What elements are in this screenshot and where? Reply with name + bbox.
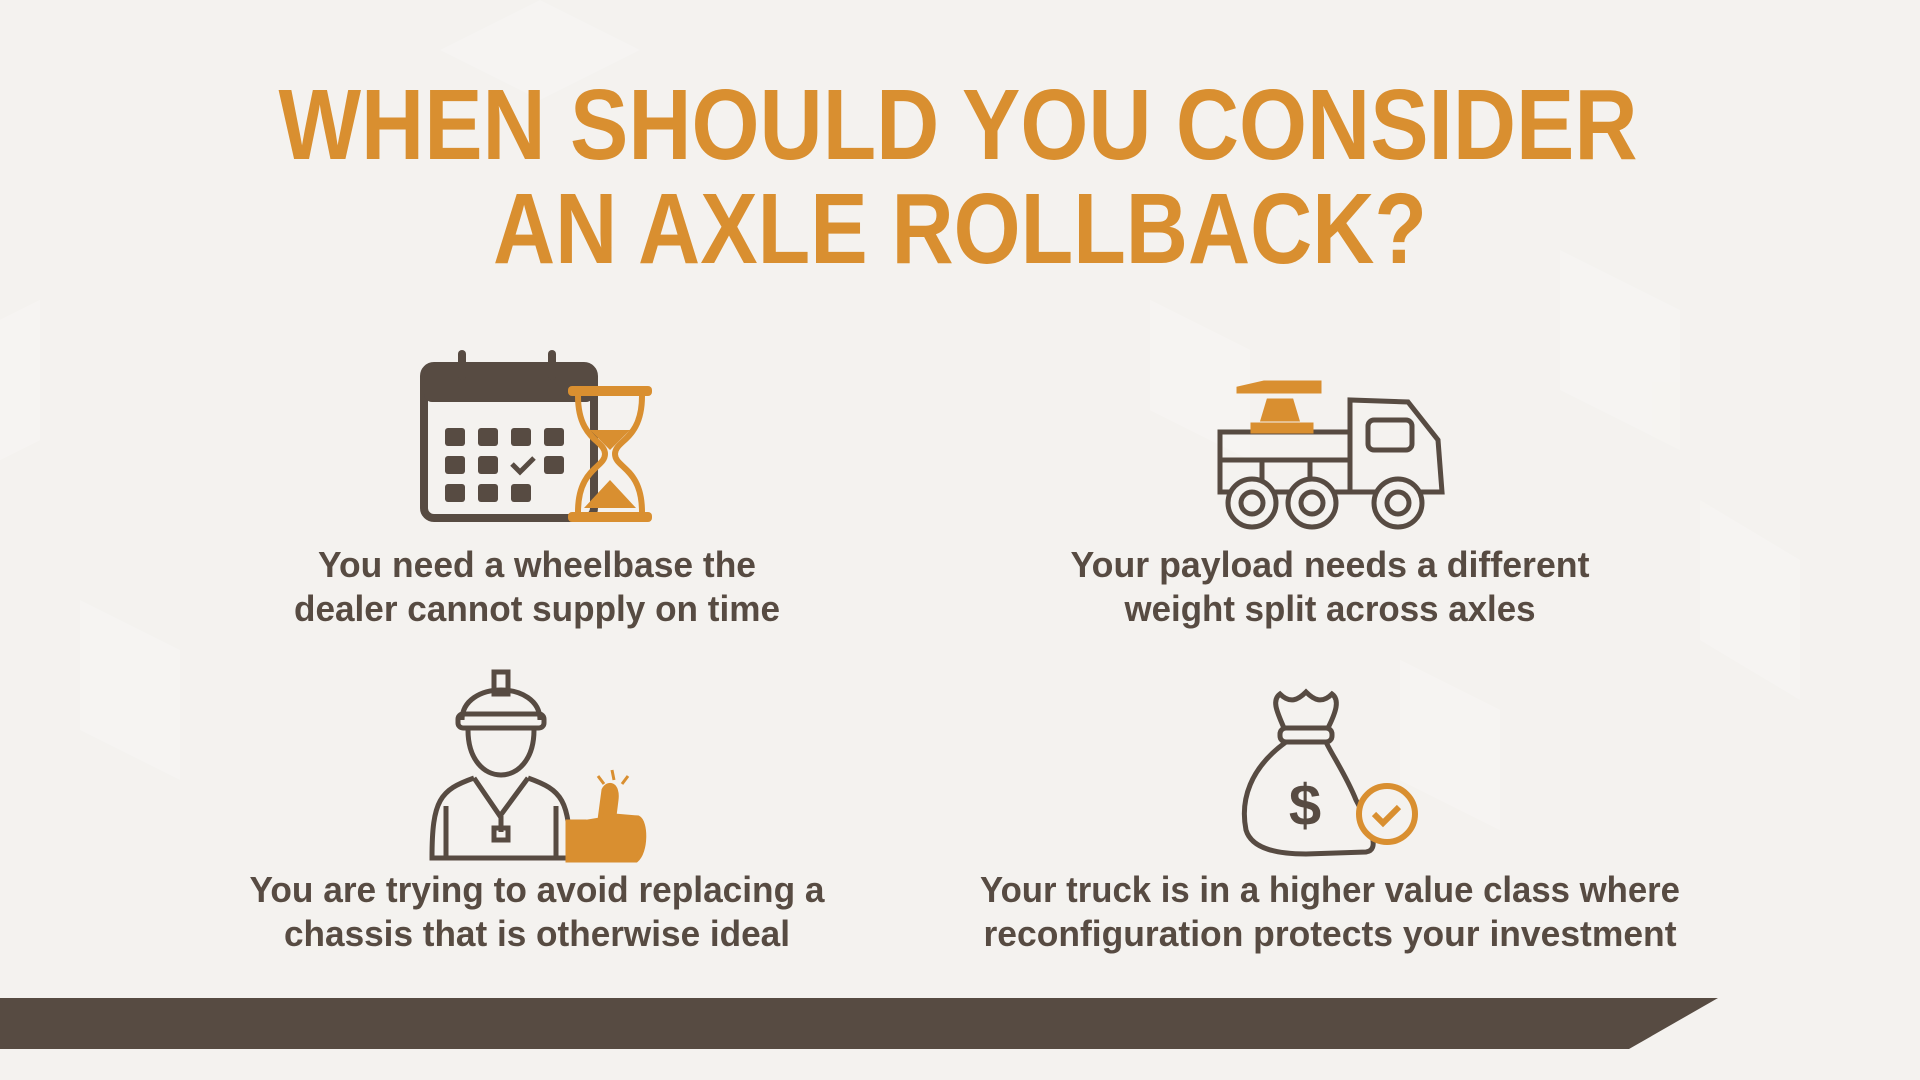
text: chassis: chassis that is otherwise ideal bbox=[284, 913, 790, 954]
text: investment: reconfiguration protects your investment bbox=[984, 913, 1677, 954]
text: payload bbox=[1070, 544, 1590, 629]
icon: worker thumbs up bbox=[432, 672, 644, 860]
text: chassis: You are trying to avoid replacing a bbox=[250, 869, 825, 910]
icon: calendar and hourglass bbox=[424, 350, 652, 522]
text: wheelbase: You need a wheelbase the bbox=[318, 544, 756, 585]
text: investment: Your truck is in a higher value class where bbox=[980, 869, 1680, 910]
bottom bar bbox=[0, 998, 1718, 1049]
icon: truck with anvil bbox=[1220, 382, 1442, 527]
title: AN AXLE ROLLBACK? bbox=[493, 173, 1427, 285]
icon: money bag with check: $ bbox=[1289, 773, 1321, 838]
text: wheelbase bbox=[294, 544, 780, 629]
icon: money bag with check bbox=[1244, 692, 1415, 854]
title bbox=[278, 69, 1638, 285]
title: WHEN SHOULD YOU CONSIDER bbox=[278, 69, 1638, 181]
text: chassis bbox=[250, 869, 825, 954]
text: payload: Your payload needs a different bbox=[1070, 544, 1590, 585]
text: investment bbox=[980, 869, 1680, 954]
text: payload: weight split across axles bbox=[1124, 588, 1536, 629]
text: wheelbase: dealer cannot supply on time bbox=[294, 588, 780, 629]
